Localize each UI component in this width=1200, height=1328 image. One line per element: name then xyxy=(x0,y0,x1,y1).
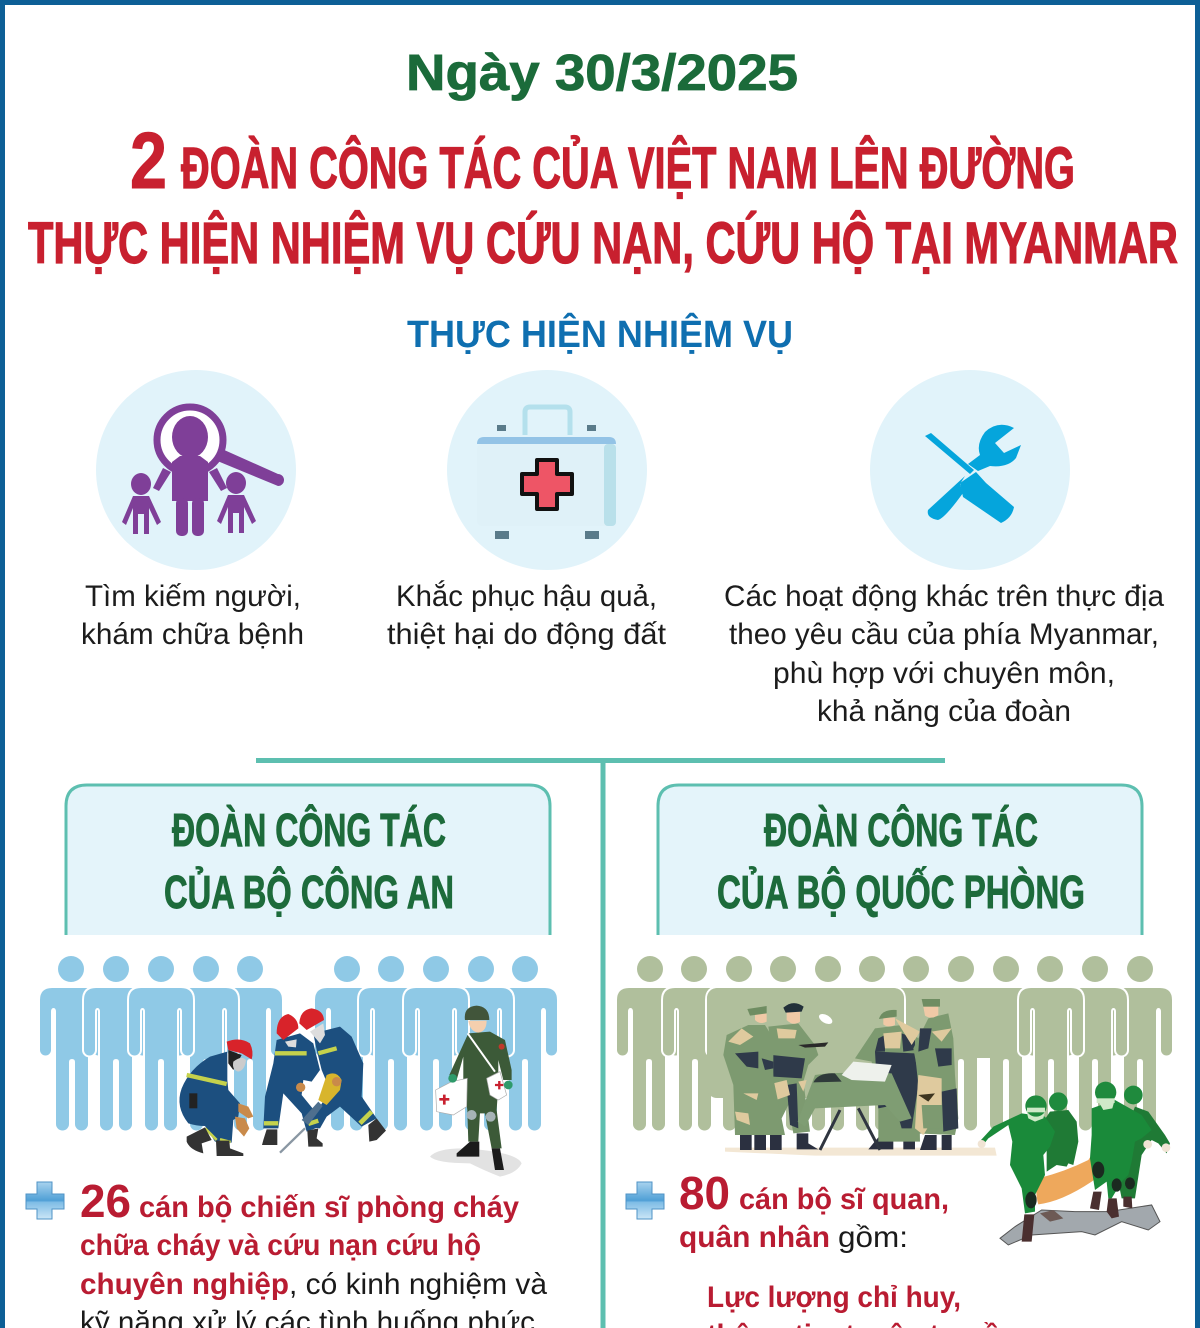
label xyxy=(81,580,304,651)
heading tab: ĐOÀN CÔNG TÁC xyxy=(764,804,1038,856)
text: 80 officers: cán bộ sĩ quan, xyxy=(739,1183,949,1216)
connector lines xyxy=(256,760,945,1328)
people silhouettes: green xyxy=(617,956,1172,1130)
text: 80 officers: 80 xyxy=(679,1167,730,1219)
illustration: medic soldier xyxy=(430,1006,522,1177)
section heading: tasks: THỰC HIỆN NHIỆM VỤ xyxy=(407,312,793,356)
main title: 2 xyxy=(130,116,167,205)
main title xyxy=(28,116,1178,276)
label: Tìm kiếm người, xyxy=(85,580,301,613)
icon: wrench and screwdriver xyxy=(925,425,1021,523)
text: 26 rescuers: 26 xyxy=(80,1175,131,1227)
label: khám chữa bệnh xyxy=(81,618,304,651)
text: 80 officers: gồm: xyxy=(838,1221,908,1254)
heading tab xyxy=(66,785,550,935)
text: 26 rescuers: chữa cháy và cứu nạn cứu hộ xyxy=(80,1229,481,1262)
icon: plus xyxy=(626,1182,664,1219)
task 1: search and treat xyxy=(81,370,304,651)
label xyxy=(387,580,667,651)
text: 80 officers: Lực lượng chỉ huy, xyxy=(707,1281,961,1314)
label: thiệt hại do động đất xyxy=(387,618,667,651)
panel: Ministry of Public Security xyxy=(26,785,557,1328)
text: 26 rescuers: , có kinh nghiệm và xyxy=(289,1268,547,1301)
icon: plus xyxy=(26,1182,64,1219)
text: 26 rescuers xyxy=(80,1175,547,1328)
people silhouettes: blue xyxy=(40,956,557,1130)
task 3: other field activities xyxy=(724,370,1164,728)
heading tab: CỦA BỘ CÔNG AN xyxy=(164,866,454,918)
text: 80 officers xyxy=(679,1167,1017,1328)
label: Khắc phục hậu quả, xyxy=(396,580,657,613)
label: phù hợp với chuyên môn, xyxy=(773,657,1115,690)
label: Các hoạt động khác trên thực địa xyxy=(724,580,1164,613)
illustration: crouching firefighter xyxy=(179,1040,253,1156)
heading tab: ĐOÀN CÔNG TÁC xyxy=(172,804,446,856)
icon: magnifier over family xyxy=(122,407,284,536)
text: 26 rescuers: chuyên nghiệp xyxy=(80,1268,289,1301)
illustration: soldiers carrying stretcher xyxy=(978,1082,1170,1245)
illustration: camouflage soldiers at table xyxy=(723,999,997,1156)
heading tab xyxy=(658,785,1142,935)
date heading: Ngày 30/3/2025 xyxy=(406,44,798,101)
label xyxy=(724,580,1164,728)
label: theo yêu cầu của phía Myanmar, xyxy=(729,618,1159,651)
text: 26 rescuers: cán bộ chiến sĩ phòng cháy xyxy=(139,1191,519,1224)
panel: Ministry of National Defence xyxy=(617,785,1172,1328)
label: khả năng của đoàn xyxy=(817,695,1071,728)
task 2: fix consequences xyxy=(387,370,667,651)
icon: first aid case xyxy=(477,407,616,539)
text: 80 officers: quân nhân xyxy=(679,1221,830,1254)
illustration: firefighters with jackhammer xyxy=(262,1008,386,1153)
